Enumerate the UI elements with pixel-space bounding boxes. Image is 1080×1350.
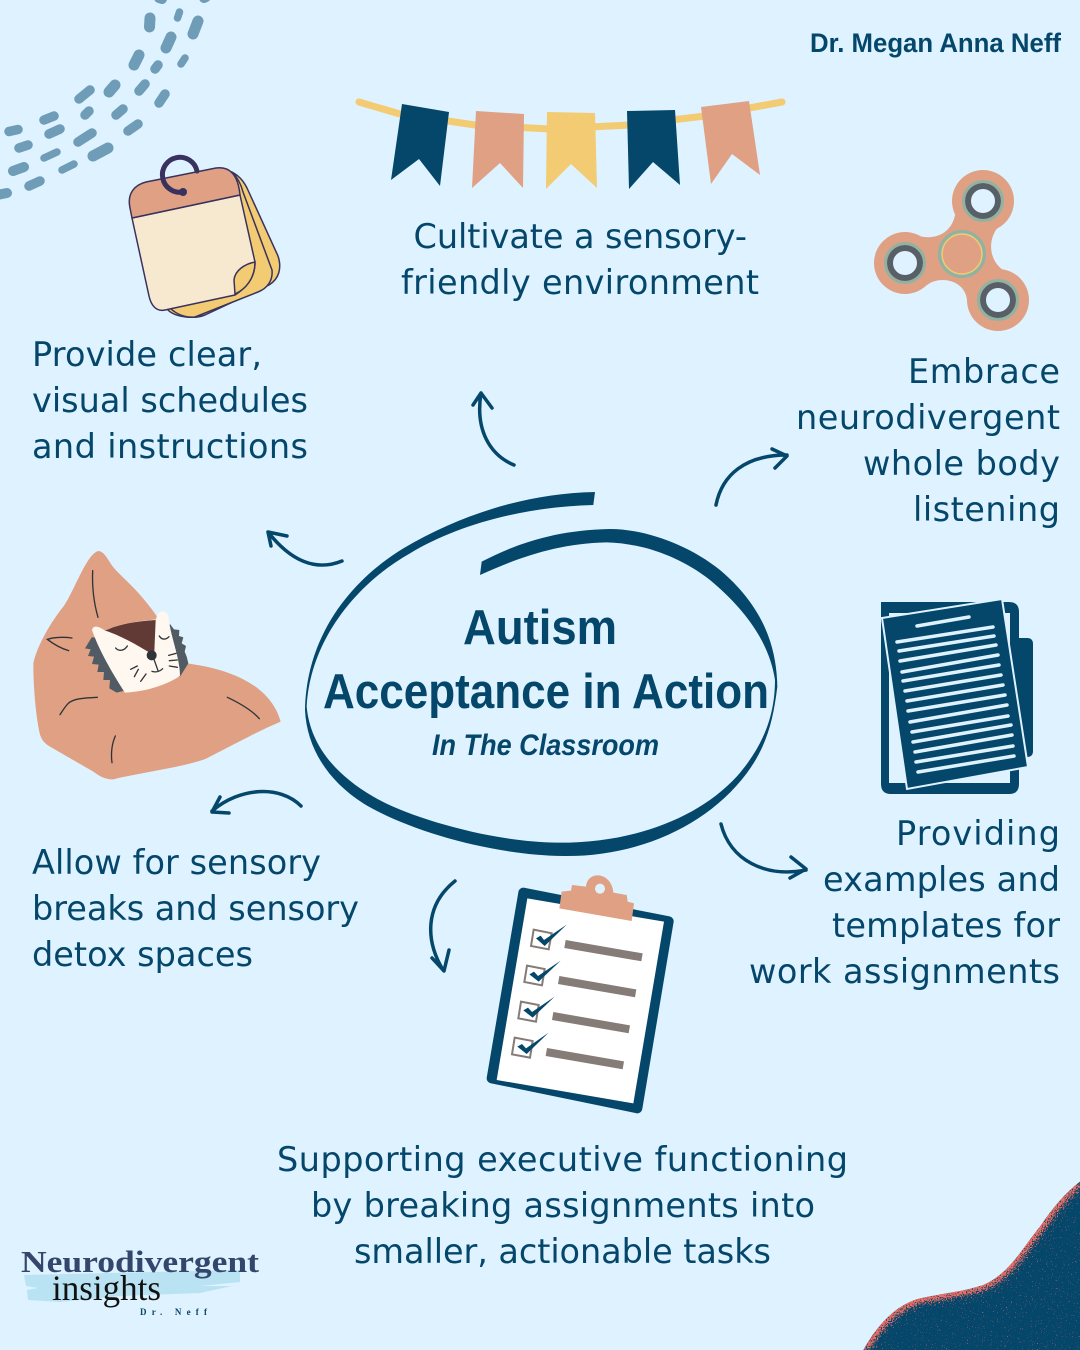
text: examples and templates: templates for: [832, 906, 1060, 945]
text: sensory-friendly environment: Cultivate a sensory-: [414, 217, 747, 256]
text: executive functioning: Supporting executive functioning: [277, 1140, 848, 1179]
decorative dashes top-left: [0, 0, 206, 195]
logo: Neurodivergent Insights: Neurodivergent: [21, 1244, 260, 1279]
text: sensory-friendly environment: friendly environment: [401, 263, 759, 302]
text: visual schedules: visual schedules: [32, 381, 308, 420]
author credit: Dr. Megan Anna Neff: [810, 28, 1062, 58]
text: whole body listening: Embrace: [908, 352, 1060, 391]
text: sensory breaks: [32, 843, 359, 974]
text: whole body listening: neurodivergent: [796, 398, 1060, 437]
text: examples and templates: [749, 814, 1060, 991]
icon: document stack: [881, 599, 1033, 794]
icon: bunting banner: [359, 101, 782, 189]
arrow: to sensory breaks: [212, 792, 301, 813]
decorative corner blob: [863, 1182, 1080, 1350]
text: sensory breaks: Allow for sensory: [32, 843, 321, 882]
title: Acceptance in Action: [323, 665, 769, 719]
icon: hedgehog in bean bag: [33, 551, 281, 779]
icon: calendar notepad: [129, 157, 280, 317]
logo: Neurodivergent Insights: [21, 1244, 260, 1317]
text: examples and templates: examples and: [823, 860, 1060, 899]
arrow: to executive functioning: [431, 881, 455, 971]
icon: clipboard checklist: [492, 875, 669, 1108]
text: sensory-friendly environment: [401, 217, 759, 302]
text: executive functioning: by breaking assignments into: [311, 1186, 815, 1225]
text: sensory breaks: breaks and sensory: [32, 889, 359, 928]
text: executive functioning: smaller, actionable tasks: [354, 1232, 771, 1271]
arrow: to sensory-friendly environment: [473, 393, 514, 465]
text: executive functioning: [277, 1140, 848, 1271]
logo: Neurodivergent Insights: Dr. Neff: [140, 1307, 208, 1317]
text: examples and templates: Providing: [896, 814, 1060, 853]
arrow: to visual schedules: [268, 532, 342, 565]
text: whole body listening: [796, 352, 1060, 529]
icon: fidget spinner: [874, 170, 1029, 331]
text: visual schedules: and instructions: [32, 427, 308, 466]
arrow: to whole body listening: [716, 449, 787, 505]
text: examples and templates: work assignments: [749, 952, 1060, 991]
text: whole body listening: whole body: [863, 444, 1060, 483]
title: [323, 601, 769, 762]
text: visual schedules: [32, 335, 308, 466]
text: sensory breaks: detox spaces: [32, 935, 253, 974]
arrow: to examples and templates: [721, 824, 806, 878]
central hand-drawn ellipse: [305, 492, 777, 856]
logo: Neurodivergent Insights: insights: [52, 1268, 161, 1308]
title: In The Classroom: [432, 729, 659, 762]
title: Autism: [463, 601, 617, 655]
text: whole body listening: listening: [913, 490, 1060, 529]
text: visual schedules: Provide clear,: [32, 335, 262, 374]
